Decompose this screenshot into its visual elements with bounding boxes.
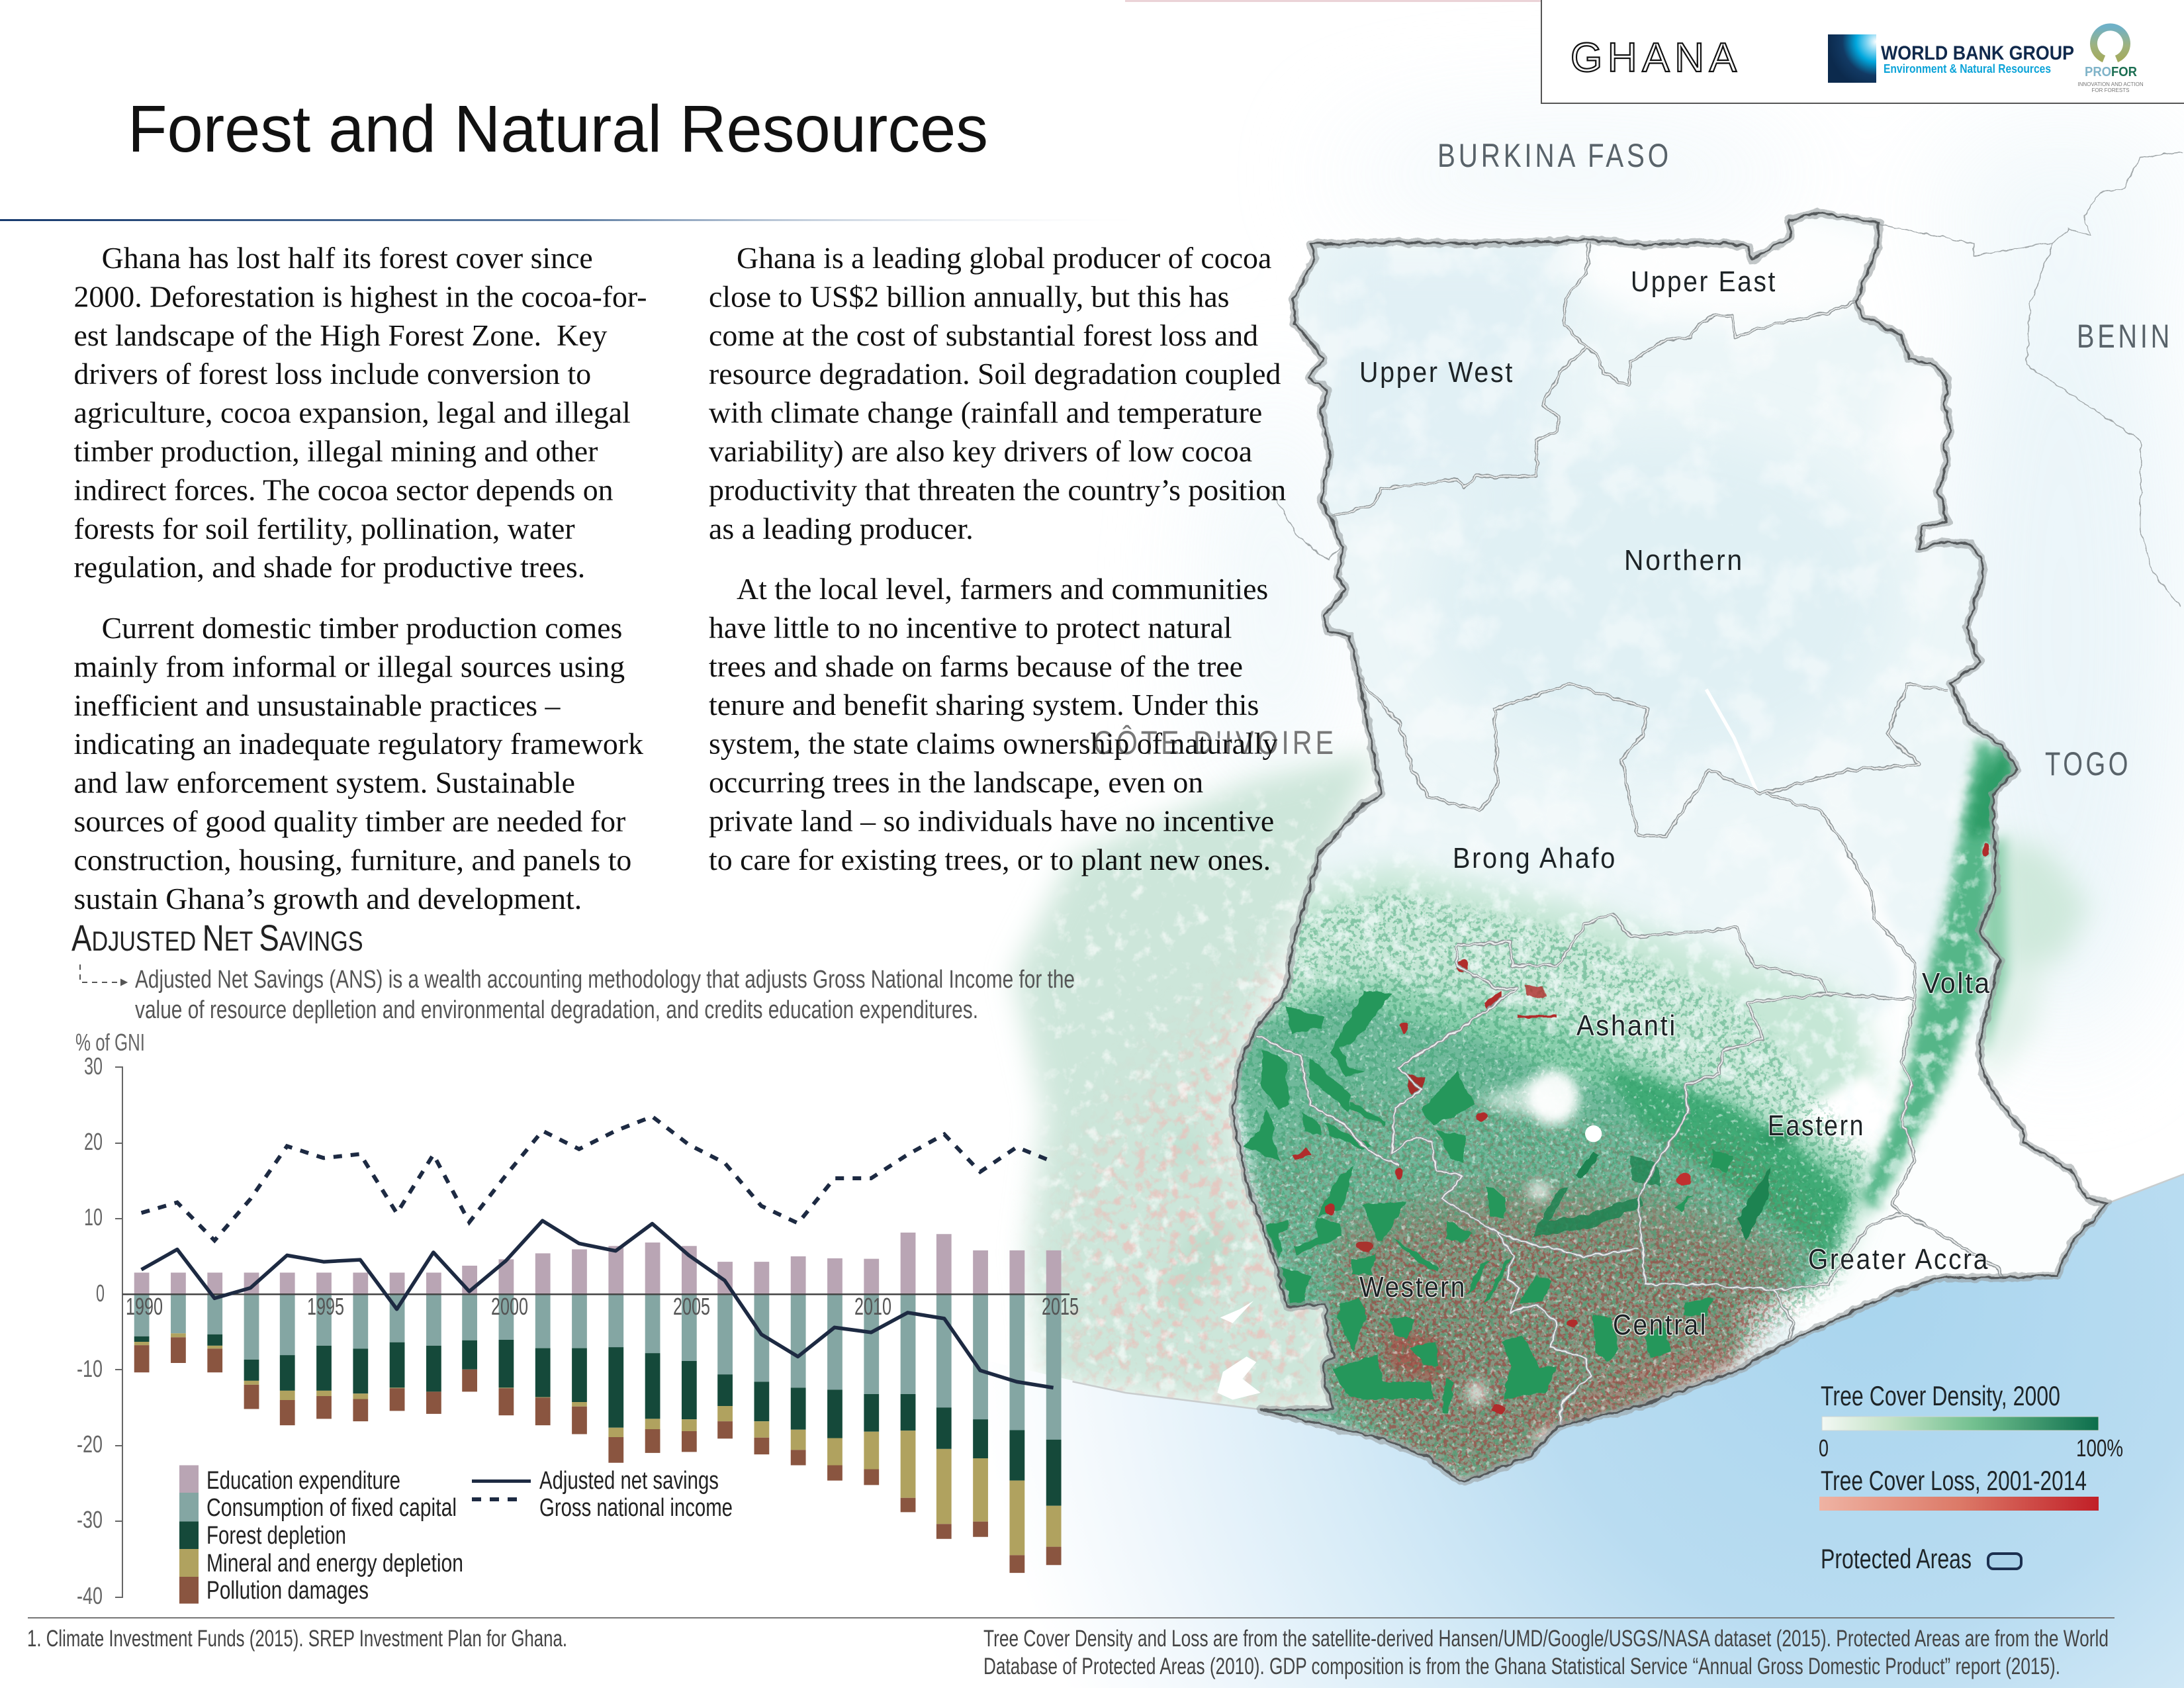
region labels: Greater Accra — [1808, 1243, 1989, 1276]
forest loss hot spots — [1293, 843, 1989, 1414]
logo: World Bank Group: Environment & Natural Resources — [1884, 62, 2051, 75]
y axis: -30 — [77, 1506, 103, 1533]
map legend — [1819, 1380, 2123, 1574]
text block: left column: Current domestic timber production comes — [102, 611, 622, 645]
text block: right column: private land – so individuals have no incentive — [709, 804, 1274, 837]
legend: tree cover density: 0 — [1819, 1434, 1829, 1462]
country name labels: TOGO — [2045, 745, 2131, 782]
title: Forest and Natural Resources — [128, 92, 988, 166]
text block: right column: come at the cost of substantial forest loss and — [709, 318, 1258, 352]
region labels: Ashanti — [1576, 1009, 1677, 1042]
x axis years: 2005 — [673, 1293, 710, 1320]
region labels: Eastern — [1768, 1109, 1865, 1142]
line: gross national income — [142, 1117, 1054, 1241]
chart legend: Consumption of fixed capital — [206, 1494, 457, 1522]
Ghana land cover — [975, 195, 2184, 1532]
legend: tree cover density: 100% — [2076, 1434, 2123, 1462]
series: consumption of fixed capital — [134, 1294, 1062, 1440]
text block: left column: Ghana has lost half its forest cover since — [102, 241, 593, 275]
region labels — [1359, 265, 1991, 1341]
footer rule — [28, 1617, 2115, 1618]
legend: tree cover density — [1819, 1380, 2123, 1462]
bar chart: adjusted net savings — [75, 1029, 1079, 1609]
ANS explanation text: value of resource deplletion and environmental degradation, and credits education expenditures. — [135, 996, 978, 1024]
text block: right column: trees and shade on farms because of the tree — [709, 649, 1243, 683]
region labels: Volta — [1922, 967, 1991, 1000]
text block: left column: and law enforcement system. Sustainable — [74, 766, 575, 800]
footnote: source: 1. Climate Investment Funds (2015). SREP Investment Plan for Ghana. — [27, 1626, 567, 1652]
text block: right column: resource degradation. Soil degradation coupled — [709, 357, 1281, 391]
logo: PROFOR: FOR FORESTS — [2092, 87, 2129, 93]
x axis years — [126, 1293, 1079, 1320]
map of Ghana — [905, 125, 2184, 1688]
speckle texture — [975, 696, 2184, 1532]
text block: right column: have little to no incentive to protect natural — [709, 610, 1232, 644]
y axis: -10 — [77, 1355, 103, 1382]
text block: right column: close to US$2 billion annually, but this has — [709, 279, 1230, 313]
y axis: 30 — [84, 1053, 103, 1080]
line: adjusted net savings — [142, 1221, 1054, 1387]
data credits — [983, 1626, 2109, 1679]
Ghana national border — [1233, 212, 2107, 1481]
title rule — [0, 219, 1158, 221]
y axis: -20 — [77, 1430, 103, 1458]
x axis years: 2000 — [491, 1293, 528, 1320]
reddish degraded zone — [1337, 1184, 1797, 1483]
neighbouring country borders — [1267, 152, 2181, 607]
text block: right column: to care for existing trees, or to plant new ones. — [709, 843, 1271, 876]
region boundaries — [1257, 242, 2003, 1424]
text block: right column: variability) are also key drivers of low cocoa — [709, 434, 1252, 468]
text block: right column: system, the state claims ownership of naturally — [709, 727, 1277, 761]
logo: PROFOR — [2077, 27, 2144, 93]
text block: right column: tenure and benefit sharing system. Under this — [709, 688, 1259, 722]
y axis title: % of GNI — [75, 1029, 145, 1056]
country name labels: BURKINA FASO — [1437, 137, 1672, 174]
text block: left column: forests for soil fertility, pollination, water — [74, 512, 575, 545]
river — [1706, 689, 1758, 794]
white lake Volta — [1839, 849, 1905, 1156]
ANS explanation text — [135, 966, 1075, 1024]
south-east white coastal plain — [1769, 975, 2117, 1344]
x axis years: 2015 — [1042, 1293, 1079, 1320]
country name labels — [1093, 137, 2173, 782]
light green belt — [1253, 867, 1880, 1254]
logo: PROFOR: INNOVATION AND ACTION — [2077, 81, 2144, 87]
text block: left column: indirect forces. The cocoa sector depends on — [74, 473, 614, 506]
y axis: -40 — [77, 1582, 103, 1609]
text block: left column: drivers of forest loss include conversion to — [74, 357, 591, 391]
text block: left column: indicating an inadequate regulatory framework — [74, 727, 643, 761]
y axis: 20 — [84, 1128, 103, 1155]
Volta green strip — [1861, 738, 2017, 1211]
region labels: Northern — [1624, 544, 1744, 577]
arrow: dashed leader — [80, 964, 126, 985]
protected forest reserves — [1243, 990, 1733, 1412]
text block: left column: timber production, illegal mining and other — [74, 434, 598, 468]
neighbouring Cote d'Ivoire vegetation — [1004, 745, 1375, 1410]
ANS explanation text: Adjusted Net Savings (ANS) is a wealth accounting methodology that adjusts Gross National Income for the — [135, 966, 1075, 994]
x axis years: 1995 — [307, 1293, 344, 1320]
series: education expenditure — [134, 1233, 1062, 1294]
text block: left column: agriculture, cocoa expansion, legal and illegal — [74, 396, 631, 430]
x axis years: 2010 — [854, 1293, 891, 1320]
chart legend: Mineral and energy depletion — [206, 1550, 463, 1577]
region labels: Central — [1613, 1309, 1707, 1341]
main forest belt — [1237, 975, 1865, 1284]
chart legend: Pollution damages — [206, 1577, 369, 1605]
text block: right column: with climate change (rainfall and temperature — [709, 396, 1262, 430]
country name labels: CÔTE D'IVOIRE — [1093, 724, 1337, 761]
pale background land — [1219, 125, 2184, 1045]
text block: left column: mainly from informal or illegal sources using — [74, 649, 625, 683]
legend: tree cover loss — [1819, 1465, 2099, 1511]
coastal lagoon — [1217, 1356, 1261, 1400]
zero line — [122, 1293, 1069, 1295]
text block: right column: productivity that threaten the country’s position — [709, 473, 1286, 506]
region labels: Brong Ahafo — [1453, 842, 1617, 874]
text block: left column: 2000. Deforestation is highest in the cocoa-for- — [74, 279, 647, 313]
logo: World Bank Group: WORLD BANK GROUP — [1881, 42, 2074, 64]
series: forest depletion — [134, 1335, 1062, 1506]
logo: World Bank Group — [1828, 34, 2074, 83]
Kumasi clearing — [1467, 1070, 1580, 1446]
text block: left column: construction, housing, furniture, and panels to — [74, 843, 631, 876]
top edge line — [1125, 0, 2184, 2]
text block: left column: sources of good quality timber are needed for — [74, 804, 625, 838]
country name: GHANA — [1570, 35, 1737, 81]
region labels: Upper East — [1631, 265, 1777, 298]
heading: Adjusted Net Savings: ADJUSTED NET SAVINGS — [71, 917, 363, 959]
chart legend — [179, 1466, 733, 1605]
text block: left column: est landscape of the High Forest Zone. Key — [74, 318, 607, 352]
y axis — [77, 1053, 122, 1609]
ocean — [975, 1174, 2184, 1688]
legend: protected areas: Protected Areas — [1821, 1543, 1972, 1574]
chart legend: Education expenditure — [206, 1467, 400, 1495]
series: pollution damages — [134, 1337, 1062, 1573]
stacked bars — [134, 1233, 1062, 1573]
text block: left column: regulation, and shade for productive trees. — [74, 550, 585, 584]
text block: right column: as a leading producer. — [709, 512, 974, 545]
series: mineral and energy depletion — [134, 1333, 1062, 1555]
text block: left column — [74, 241, 647, 915]
y axis: 0 — [96, 1280, 105, 1307]
Togo-side forest — [1981, 835, 2089, 1086]
text block: right column — [709, 241, 1286, 876]
x axis years: 1990 — [126, 1293, 163, 1320]
text block: left column: inefficient and unsustainable practices – — [74, 688, 561, 722]
text block: right column: At the local level, farmers and communities — [737, 572, 1268, 606]
legend: tree cover density: Tree Cover Density, 2000 — [1821, 1380, 2060, 1411]
text block: right column: occurring trees in the landscape, even on — [709, 765, 1203, 799]
header panel with logos — [1541, 0, 2184, 103]
legend: tree cover loss: Tree Cover Loss, 2001-2014 — [1821, 1465, 2087, 1496]
region labels: Upper West — [1359, 356, 1514, 389]
logo: PROFOR: PROFOR — [2085, 65, 2138, 79]
y axis: 10 — [84, 1203, 103, 1231]
region labels: Western — [1359, 1271, 1467, 1303]
text block: left column: sustain Ghana’s growth and development. — [74, 882, 582, 915]
text block: right column: Ghana is a leading global producer of cocoa — [737, 241, 1271, 275]
chart legend: Forest depletion — [206, 1522, 346, 1550]
chart legend: Gross national income — [539, 1494, 733, 1522]
chart legend: Adjusted net savings — [539, 1467, 719, 1495]
